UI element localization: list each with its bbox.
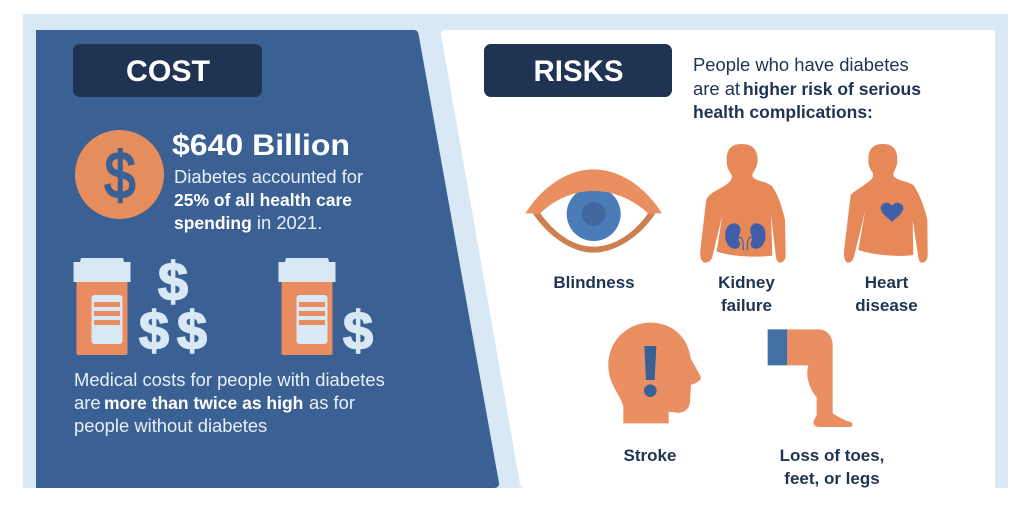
icon: pill bottle with three dollar signs: $ [158,252,188,312]
text: share of health care spending: spending in 2021. [174,212,322,233]
icon: pill bottle with three dollar signs: $ [177,301,207,361]
risks intro text: health complications: [693,102,873,122]
icon: body with kidneys [700,144,786,263]
icon: body with heart [844,144,928,263]
text: medical cost comparison: are [74,392,101,413]
cost panel background [36,30,499,488]
label: kidney failure [718,273,775,315]
label: loss of toes, feet, or legs [780,446,884,488]
label: heart disease: Heart [865,273,909,292]
label: kidney failure: failure [721,296,772,315]
label: loss of toes, feet, or legs: feet, or legs [784,469,880,488]
text: medical cost comparison: more than twice as high [104,393,303,413]
icon: dollar coin [75,130,164,219]
text: share of health care spending: Diabetes accounted for [174,166,363,187]
cost heading [73,44,262,97]
label: stroke: Stroke [624,446,676,465]
risks heading: RISKS [534,55,624,88]
label: loss of toes, feet, or legs: Loss of toes, [780,446,884,465]
label: kidney failure: Kidney [718,273,775,292]
icon: eye [525,169,662,253]
text: medical cost comparison [74,369,385,436]
label: heart disease: disease [855,296,918,315]
icon: head with exclamation mark [608,323,701,423]
panel: cost [36,30,499,488]
label: heart disease [855,273,918,315]
risks intro text: are at [693,78,740,99]
label: blindness: Blindness [553,273,635,292]
text: medical cost comparison: people without diabetes [74,415,267,436]
risks intro text: People who have diabetes [693,54,909,75]
icon: leg [768,329,852,427]
risks heading [484,44,672,97]
risks intro text: higher risk of serious [743,79,921,99]
text: share of health care spending [174,166,363,233]
risks intro text [693,54,921,122]
statistic: $640 billion: $640 Billion [172,129,350,162]
icon: dollar coin: $ [104,138,136,212]
text: medical cost comparison: as for [309,392,355,413]
risks panel background [441,30,995,488]
icon: pill bottle with three dollar signs: $ [139,301,169,361]
icon: pill bottle with one dollar sign: $ [343,301,373,361]
icon: pill bottle with three dollar signs [74,252,207,361]
panel: risks [441,30,995,488]
cost heading: COST [126,55,210,88]
text: medical cost comparison: Medical costs for people with diabetes [74,369,385,390]
text: share of health care spending: 25% of all health care [174,190,352,210]
icon: pill bottle with one dollar sign [278,258,373,361]
